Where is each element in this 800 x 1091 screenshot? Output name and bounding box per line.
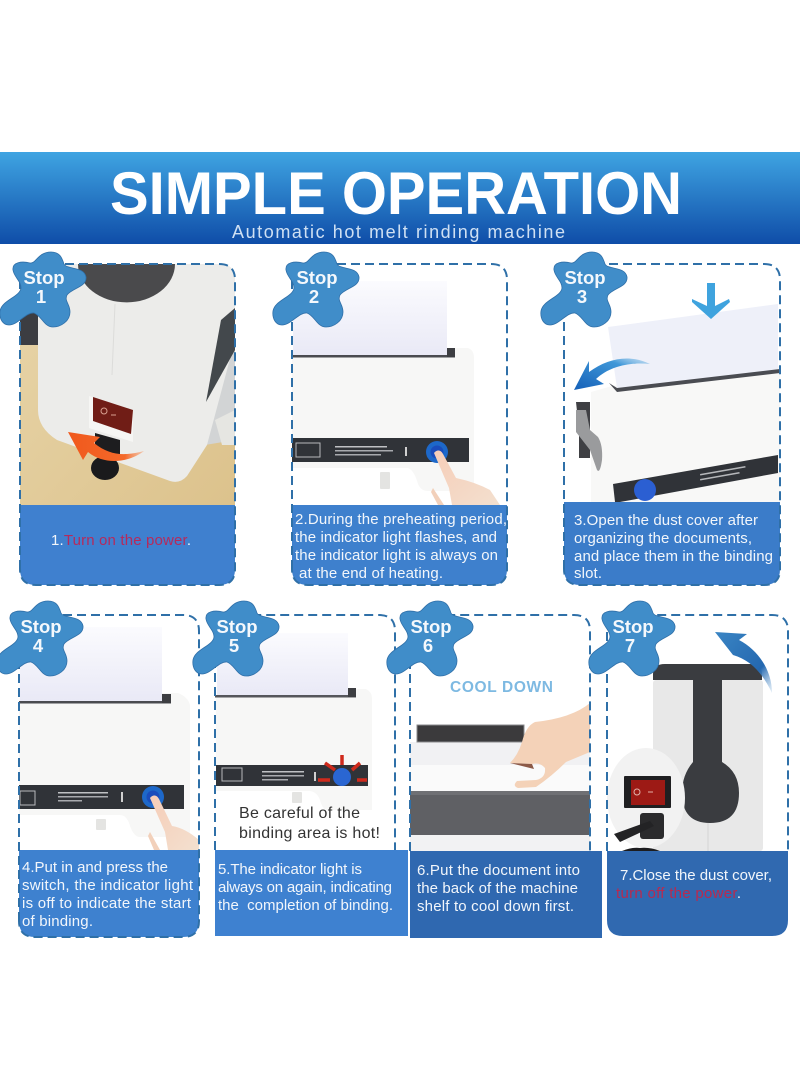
badge: 6: [423, 635, 433, 656]
caption text: 2.During the preheating period,: [295, 511, 507, 528]
caption: [292, 505, 507, 585]
dashed frame: [292, 264, 507, 585]
badge: [589, 601, 675, 676]
machine shelf with hand: [410, 703, 590, 851]
caption text: is off to indicate the start: [22, 895, 192, 912]
badge: Stop: [564, 267, 606, 288]
caption text: 6.Put the document into: [417, 862, 580, 879]
caption: [19, 850, 199, 937]
caption: [607, 851, 788, 936]
caption text: [22, 859, 194, 930]
badge: Stop: [410, 616, 452, 637]
badge: Stop: [296, 267, 338, 288]
panel: step 7: [589, 601, 788, 936]
panel: step 4: [0, 601, 199, 937]
badge: [0, 252, 86, 327]
subtitle: Automatic hot melt rinding machine: [232, 222, 565, 242]
warning text: Be careful of the: [239, 805, 360, 822]
caption text: at the end of heating.: [299, 565, 443, 582]
caption text: 1.Turn on the power.: [51, 532, 191, 549]
badge: 2: [309, 286, 319, 307]
caption text: always on again, indicating: [218, 879, 392, 896]
header banner: [0, 152, 800, 244]
badge: [193, 601, 279, 676]
machine with tilted paper: [576, 304, 780, 502]
caption text: 7.Close the dust cover,: [620, 867, 772, 884]
caption text: 5.The indicator light is: [218, 861, 362, 878]
caption text: 4.Put in and press the: [22, 859, 168, 876]
dashed frame: [564, 264, 780, 585]
badge: Stop: [612, 616, 654, 637]
badge: Stop: [216, 616, 258, 637]
arrow: down: [692, 283, 730, 319]
caption text: [295, 511, 507, 582]
caption text: turn off the power.: [616, 885, 741, 902]
dashed frame: [20, 264, 235, 585]
dashed frame: [19, 615, 199, 937]
caption text: of binding.: [22, 913, 93, 930]
badge: 1: [36, 286, 46, 307]
caption: [215, 850, 408, 936]
badge: [0, 601, 83, 676]
panel: step 2: [273, 252, 507, 585]
label: cool down: COOL DOWN: [450, 679, 553, 696]
badge: 5: [229, 635, 239, 656]
badge: Stop: [23, 267, 65, 288]
dashed frame: [215, 615, 395, 850]
panel: step 6: [387, 601, 602, 938]
caption text: the completion of binding.: [218, 897, 393, 914]
dashed frame: [410, 615, 590, 851]
panel: step 5: [193, 601, 408, 936]
machine with paper and finger: [19, 627, 199, 850]
caption: [20, 505, 235, 585]
caption text: the indicator light flashes, and: [295, 529, 497, 546]
machine with paper and finger: [292, 281, 500, 505]
photo: power switch on machine: [20, 264, 235, 505]
caption text: [417, 862, 580, 915]
dashed frame: [607, 615, 788, 851]
badge: 3: [577, 286, 587, 307]
icon: glowing button: [318, 755, 367, 786]
caption: [564, 502, 780, 585]
warning text: [239, 805, 380, 842]
title: SIMPLE OPERATION: [110, 160, 682, 227]
arrow: orange rotation: [68, 432, 144, 461]
arrow: close cover: [715, 632, 772, 693]
caption text: shelf to cool down first.: [417, 898, 574, 915]
caption text: 3.Open the dust cover after: [574, 512, 758, 529]
machine with heat warning: [215, 633, 372, 810]
badge: [541, 252, 627, 327]
badge: 4: [33, 635, 44, 656]
caption text: organizing the documents,: [574, 530, 752, 547]
caption text: switch, the indicator light: [22, 877, 194, 894]
badge: [273, 252, 359, 327]
panel: step 3: [541, 252, 780, 585]
caption text: the indicator light is always on: [295, 547, 498, 564]
caption text: [574, 512, 773, 582]
panel: step 1: [0, 252, 235, 585]
inset: power switch: [607, 748, 685, 851]
caption text: the back of the machine: [417, 880, 578, 897]
badge: Stop: [20, 616, 62, 637]
warning text: binding area is hot!: [239, 825, 380, 842]
caption text: [616, 867, 772, 902]
arrow: open cover: [574, 358, 650, 390]
badge: [387, 601, 473, 676]
caption: [410, 851, 602, 938]
caption text: slot.: [574, 565, 602, 582]
badge: 7: [625, 635, 635, 656]
machine rear with dust cover: [607, 664, 763, 851]
caption text: and place them in the binding: [574, 548, 773, 565]
caption text: [218, 861, 393, 914]
